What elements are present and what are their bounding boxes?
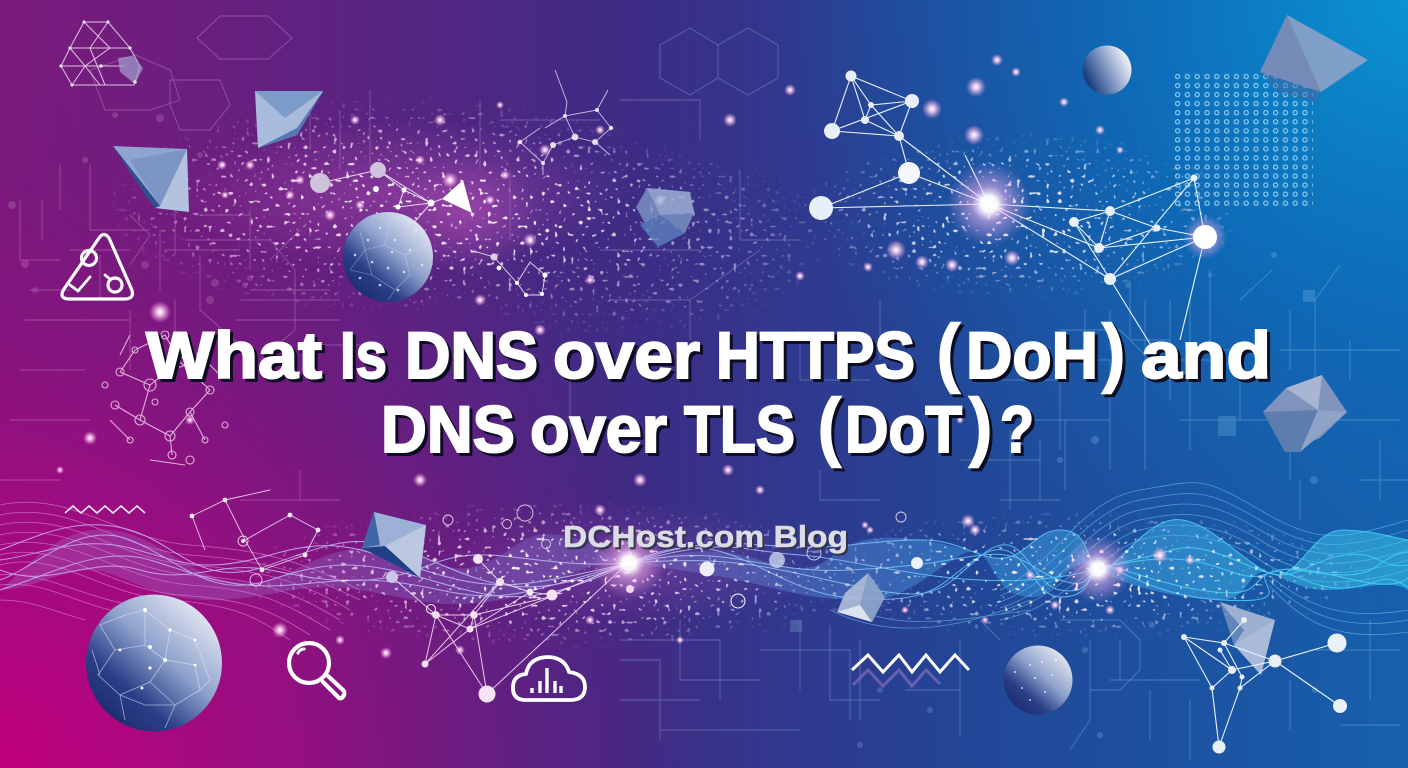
title: HTTPS [716, 318, 915, 392]
top middle molecule network [518, 70, 613, 175]
dot matrix [1175, 72, 1313, 208]
glowing dots [56, 54, 1195, 659]
light flares [593, 162, 1132, 603]
faint circuit lines right [570, 28, 1408, 760]
title [146, 309, 1271, 469]
network: top right [809, 70, 1227, 360]
title: Is [340, 318, 387, 392]
lower molecule under title band [470, 250, 548, 297]
title: DoT [845, 392, 962, 466]
polyhedron bottom right [1220, 602, 1275, 675]
polyhedron centre [636, 188, 694, 247]
title: over [553, 318, 700, 392]
sphere: upper left [343, 212, 433, 302]
title: ( [817, 383, 842, 469]
title: DNS [405, 318, 538, 392]
title: ) [1101, 309, 1126, 395]
icon: zigzag top [65, 506, 145, 513]
left doodle cluster [102, 331, 228, 465]
polyhedron wave right [837, 573, 885, 622]
network: bottom left centre [386, 552, 923, 702]
icon: warning triangle network [62, 234, 132, 299]
subtitle: DCHost.com Blog [563, 519, 848, 554]
title: and [1141, 318, 1271, 392]
icon: cloud with bars [513, 657, 585, 700]
polyhedron top left [113, 146, 189, 212]
particle field [112, 98, 1370, 648]
polyhedron top [255, 91, 323, 148]
network: bottom right [1181, 617, 1347, 754]
polyhedron right [1263, 375, 1347, 452]
title: ) [968, 383, 993, 469]
sphere: bottom centre right [1004, 646, 1072, 714]
small network: upper left [310, 162, 442, 225]
pink haze [170, 120, 830, 625]
polyhedron top right [1260, 15, 1368, 102]
sphere: large bottom left [86, 594, 222, 732]
polyhedron wave left [362, 512, 426, 578]
small white triangle [442, 180, 472, 213]
wave band [0, 520, 1408, 604]
contour lines bottom left [0, 502, 360, 640]
title: What [146, 318, 322, 392]
icon: magnifying glass [289, 643, 344, 698]
title: ? [1000, 392, 1034, 466]
title: DNS [381, 392, 515, 466]
icon: zigzag bottom [852, 655, 969, 686]
contour lines bottom right [830, 483, 1408, 635]
sphere: top right [1082, 46, 1132, 94]
title: ( [936, 309, 961, 395]
title: TLS [684, 392, 795, 466]
title: DoH [966, 318, 1098, 392]
title: over [530, 392, 667, 466]
hexagon mesh top left [59, 20, 143, 87]
network: left wave molecules [190, 490, 906, 586]
faint circuit lines left [0, 16, 800, 500]
